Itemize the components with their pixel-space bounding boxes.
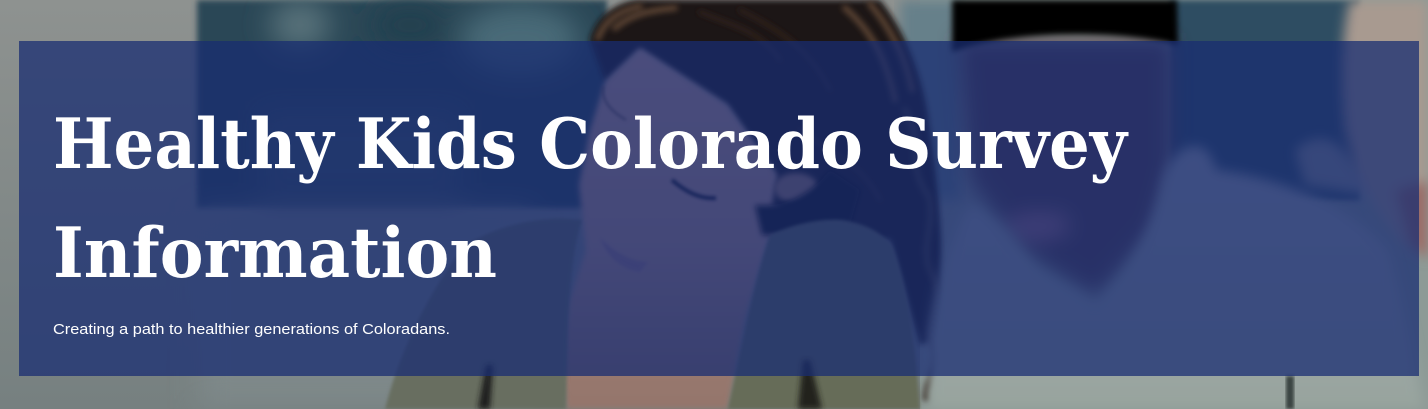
- shirt folds: [478, 360, 822, 409]
- ear: [774, 173, 818, 203]
- hair: [590, 0, 942, 345]
- facial features: [600, 86, 716, 272]
- title: [53, 104, 1129, 294]
- title: Information: [53, 213, 497, 294]
- blonde student, right edge: [1295, 0, 1428, 260]
- man's hair: [952, 0, 1178, 52]
- woman: hair, face, shirt: [385, 0, 942, 409]
- face and neck: [563, 48, 800, 409]
- nape hair: [755, 170, 860, 236]
- man's shirt: [928, 146, 1424, 409]
- man in white shirt: [928, 0, 1424, 409]
- subtitle: Creating a path to healthier generations of Coloradans.: [53, 321, 450, 338]
- title: Healthy Kids Colorado Survey: [53, 104, 1129, 185]
- olive shirt: [385, 219, 920, 409]
